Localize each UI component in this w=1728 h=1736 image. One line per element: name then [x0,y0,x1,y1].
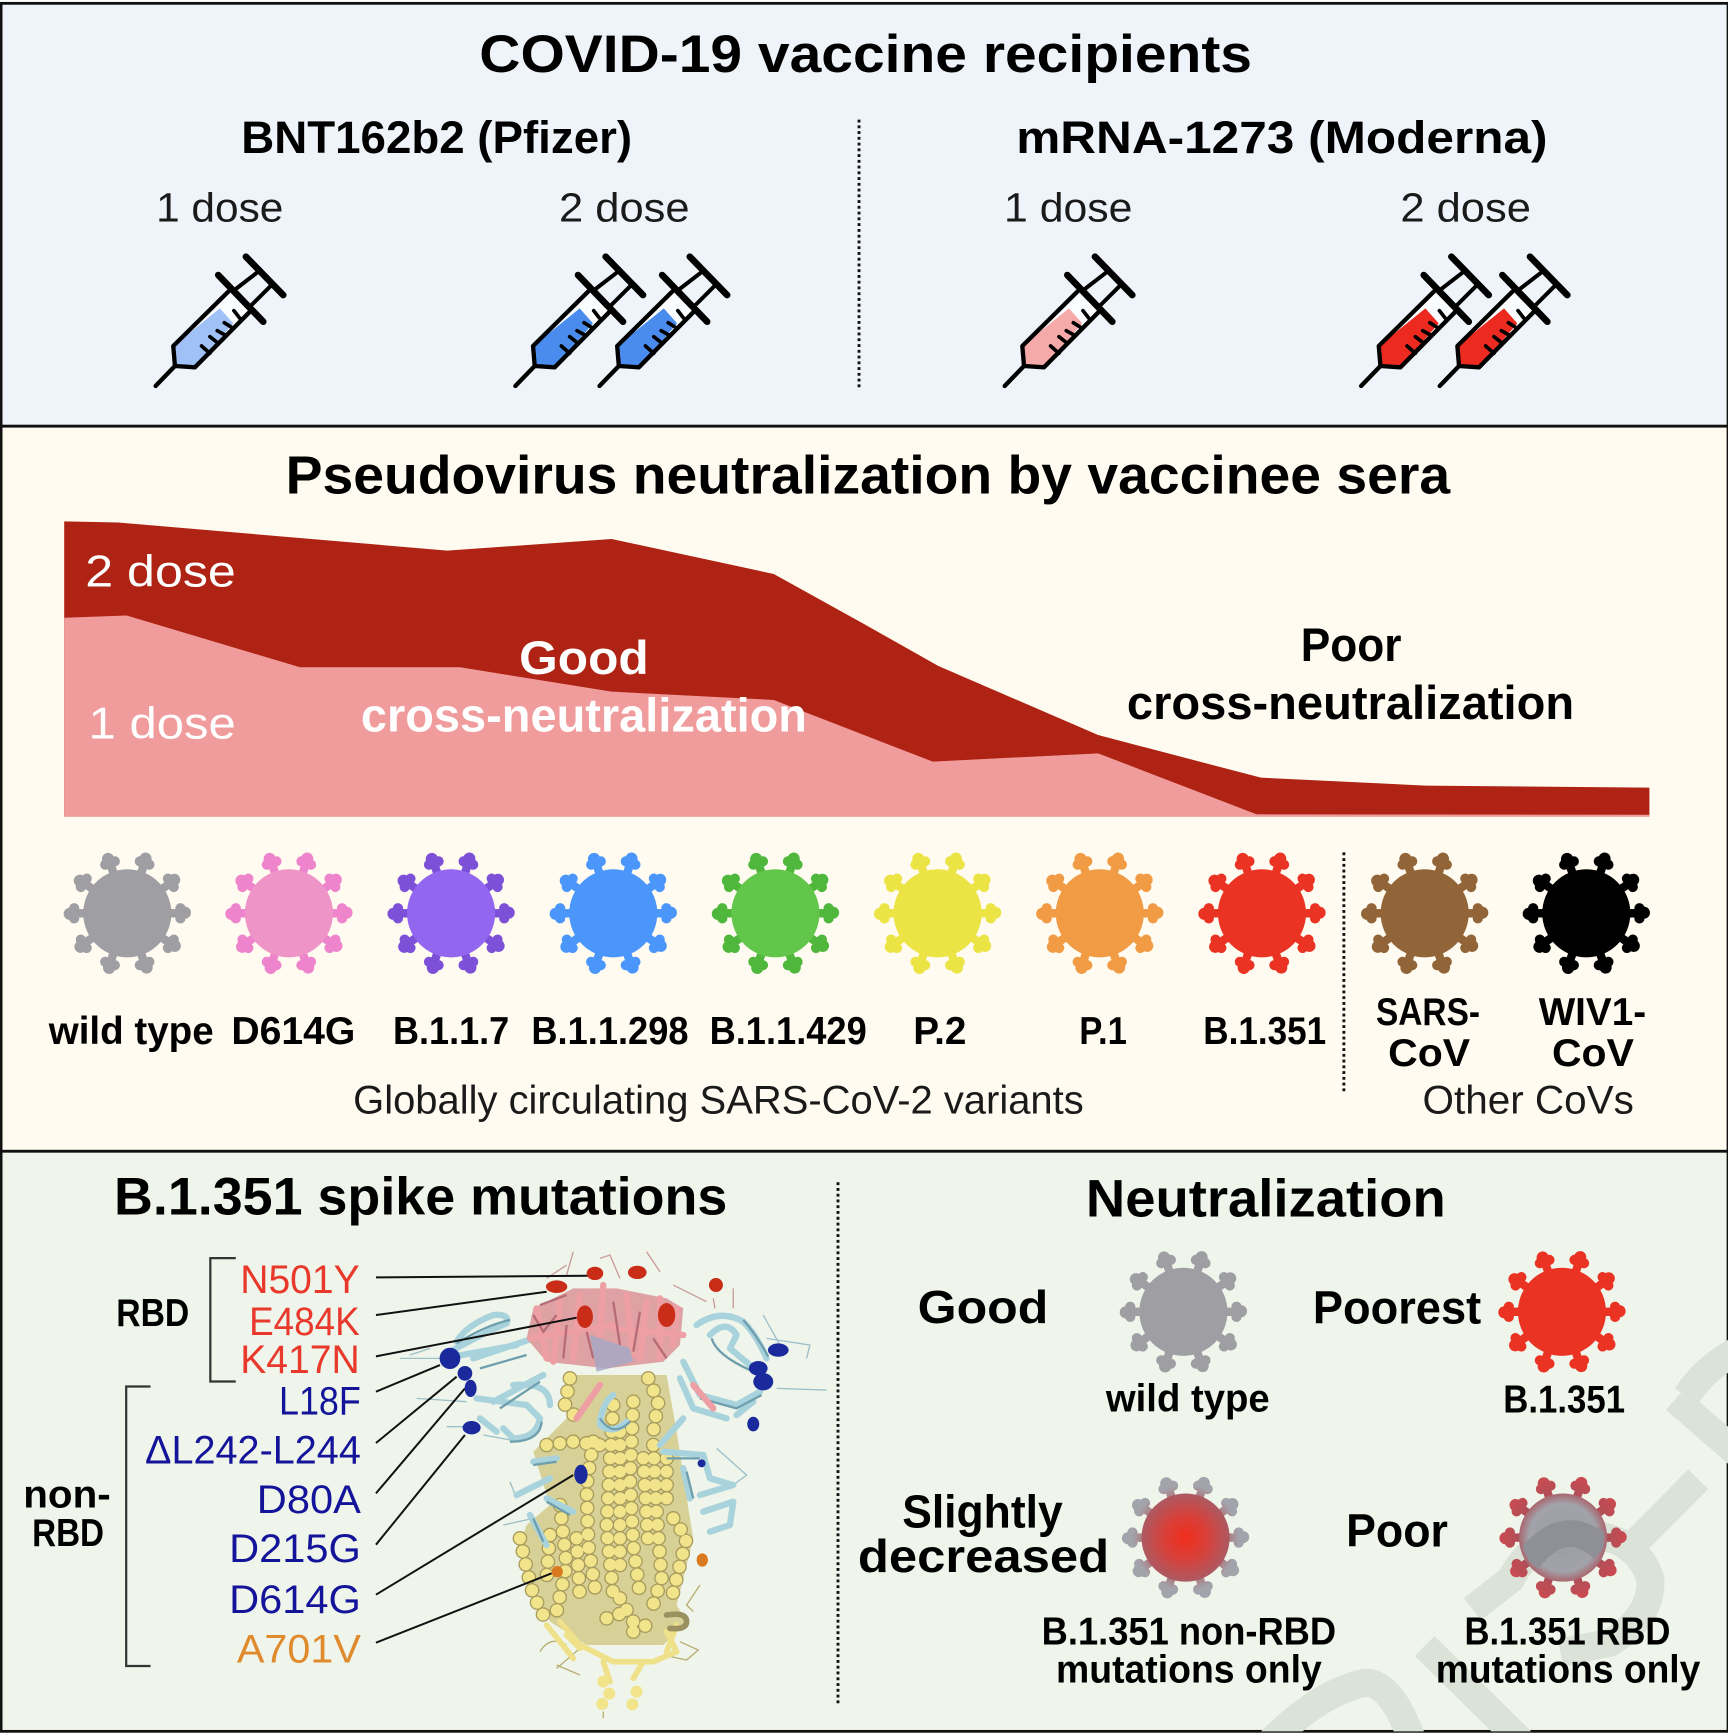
area: 1 dose [64,615,1649,817]
label: good cross-neutralization: cross-neutralization [361,690,807,743]
panel: COVID-19 vaccine recipients [1,3,1728,426]
label: Slightly decreased: decreased [858,1530,1109,1582]
label: Moderna 1 dose: 1 dose [1004,184,1132,230]
icon: virus B.1.351 [1198,850,1326,977]
icon: virus B.1.1.7 [387,850,515,977]
mutation labels: L18F [279,1379,361,1423]
protein: S2 stalk [520,1375,700,1718]
label: SARS-CoV [1376,991,1480,1075]
label: Poor: Poor [1346,1504,1448,1556]
area: 2 dose [64,521,1649,817]
spike protein structure [376,1252,827,1718]
label: B.1.351: B.1.351 [1203,1010,1326,1053]
caption: globally circulating variants: Globally circulating SARS-CoV-2 variants [353,1079,1084,1123]
icon: virus B.1.1.429 [712,850,839,977]
icon: virus B.1.351 [1498,1248,1626,1375]
label: D614G: D614G [231,1010,355,1053]
mutation labels [145,1258,361,1672]
label: poor cross-neutralization [1127,619,1574,730]
area chart: neutralization by dose [64,521,1649,817]
watermark [1270,1349,1728,1736]
label: B.1.351: B.1.351 [1503,1379,1625,1422]
label: B.1.351 RBD mutations only: B.1.351 RBD [1465,1610,1670,1653]
bracket: non-RBD [126,1387,151,1666]
label: B.1.351 non-RBD mutations only: B.1.351 non-RBD [1042,1610,1336,1653]
leader lines [376,1276,588,1643]
caption: other CoVs: Other CoVs [1422,1079,1634,1123]
panel: B.1.351 spike mutations and neutralization [1,1151,1728,1736]
label: B.1.351 non-RBD mutations only [1042,1610,1336,1692]
mutation labels: K417N [240,1338,360,1382]
bracket: RBD [210,1258,236,1382]
mutation labels: D215G [229,1527,361,1571]
icon: virus P.1 [1036,850,1163,977]
label: Slightly decreased [858,1486,1109,1582]
mutation labels: ΔL242-L244 [145,1428,361,1472]
icon: virus B.1.1.298 [550,850,677,977]
label: B.1.351 RBD mutations only: mutations only [1436,1649,1701,1692]
label: WIV1-CoV: CoV [1552,1032,1634,1075]
mutation labels: N501Y [240,1258,360,1302]
mutation labels: E484K [249,1300,360,1344]
label: non-RBD [23,1474,111,1555]
label: Moderna 2 dose: 2 dose [1400,184,1531,230]
heading: B.1.351 spike mutations: B.1.351 spike mutations [114,1167,727,1226]
icon: virus wild type [1120,1248,1247,1375]
label: WIV1-CoV [1539,991,1646,1075]
label: WIV1-CoV: WIV1- [1539,991,1646,1034]
label: B.1.351 non-RBD mutations only: mutations only [1056,1649,1322,1692]
icon: virus B.1.351 RBD only [1499,1474,1627,1601]
label: B.1.1.7: B.1.1.7 [393,1010,509,1053]
icon: virus wild type [64,850,191,977]
label: wild type: wild type [1105,1377,1270,1420]
label: Good: Good [918,1281,1048,1333]
label: Poorest: Poorest [1313,1281,1481,1333]
icon: syringes Pfizer 2 dose [515,257,727,386]
label: non-RBD: RBD [32,1512,104,1555]
icon: syringes Moderna 2 dose [1361,257,1567,386]
label: RBD: RBD [116,1292,189,1335]
mutation labels: D614G [229,1578,361,1622]
icon: virus WIV1-CoV [1523,850,1650,977]
mutation spheres [440,1266,789,1577]
label: non-RBD: non- [23,1474,111,1517]
panel: pseudovirus neutralization [1,426,1728,1151]
icon: virus SARS-CoV [1361,850,1488,977]
icon: virus P.2 [874,850,1001,977]
protein: NTD domains [400,1315,827,1545]
label: SARS-CoV: CoV [1388,1032,1470,1075]
label: B.1.1.429: B.1.1.429 [710,1010,867,1053]
label: B.1.1.298: B.1.1.298 [531,1010,689,1053]
mutation labels: A701V [237,1628,361,1672]
label: P.1: P.1 [1079,1010,1127,1053]
protein: RBD domains [527,1252,733,1418]
label: good cross-neutralization: Good [519,632,649,685]
label: Pfizer 2 dose: 2 dose [559,184,690,230]
heading: Moderna: mRNA-1273 (Moderna) [1016,112,1548,163]
heading: Pfizer: BNT162b2 (Pfizer) [241,112,632,163]
label: poor cross-neutralization: cross-neutralization [1127,677,1574,730]
icon: virus B.1.351 non-RBD only [1122,1474,1249,1601]
label: B.1.351 RBD mutations only [1436,1610,1701,1692]
label: wild type: wild type [48,1010,214,1053]
heading: neutralization: Neutralization [1086,1170,1446,1229]
label: poor cross-neutralization: Poor [1301,619,1401,672]
heading: pseudovirus neutralization: Pseudovirus neutralization by vaccinee sera [286,446,1451,506]
label: Pfizer 1 dose: 1 dose [156,184,283,230]
label: Slightly decreased: Slightly [902,1486,1063,1538]
label: P.2: P.2 [913,1010,966,1053]
label: SARS-CoV: SARS- [1376,991,1480,1034]
icon: syringe Pfizer 1 dose [156,257,283,386]
label: 2 dose: 2 dose [85,548,236,597]
icon: virus D614G [225,850,353,977]
label: 1 dose: 1 dose [89,699,236,748]
mutation labels: D80A [257,1478,361,1522]
icon: syringe Moderna 1 dose [1005,257,1132,386]
label: good cross-neutralization [361,632,807,743]
title: COVID-19 vaccine recipients [479,25,1252,84]
